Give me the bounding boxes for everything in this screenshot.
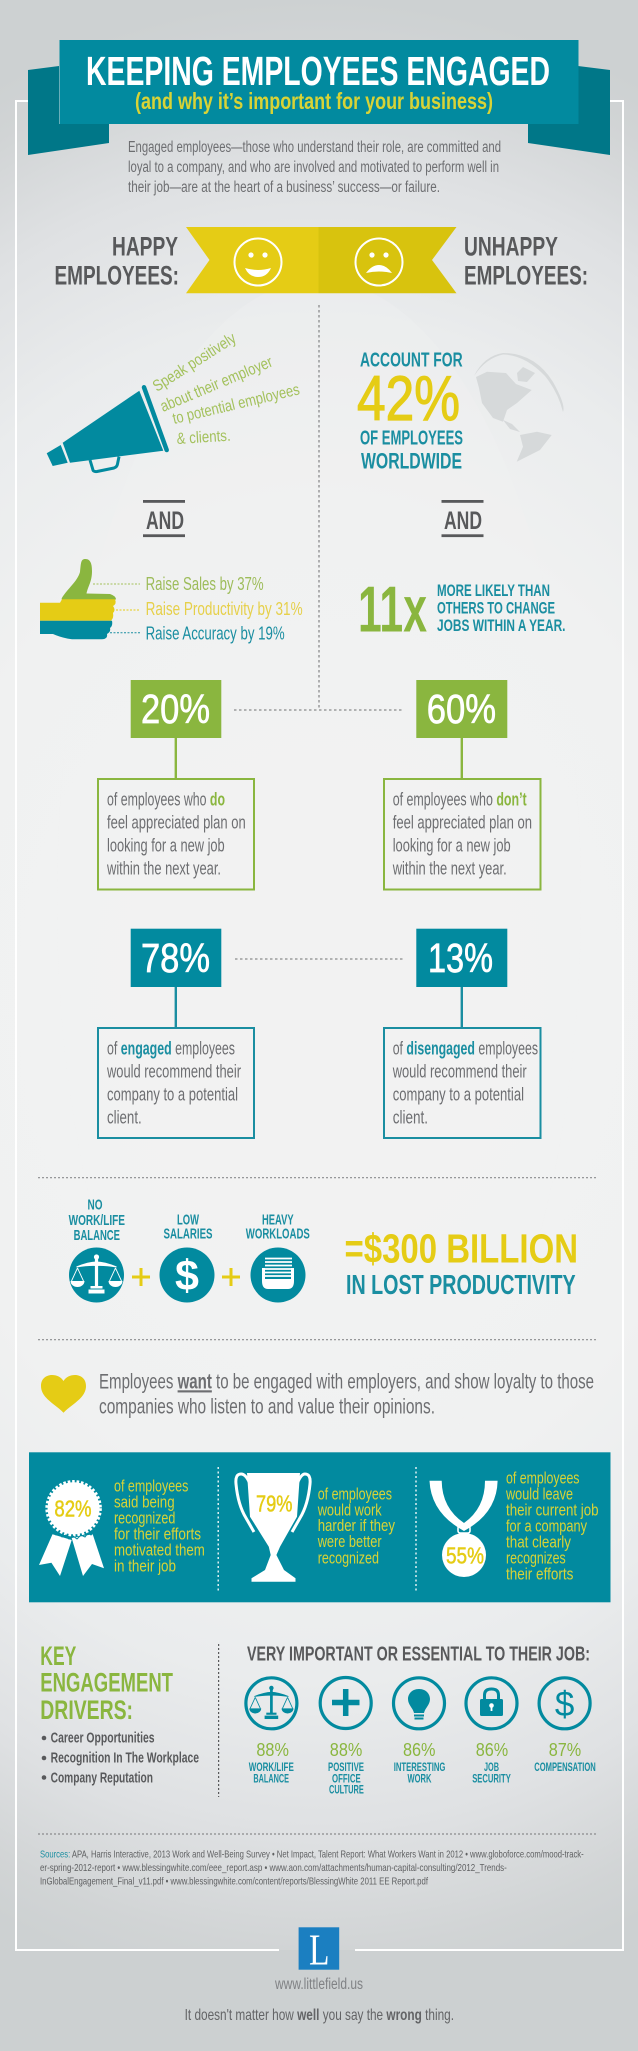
- recognition text 2: were better: [317, 1532, 382, 1551]
- drivers list: Recognition In The Workplace: [51, 1751, 199, 1767]
- driver: job security: JOB: [484, 1760, 499, 1774]
- key engagement drivers heading: [40, 1641, 173, 1725]
- card: 20 percent: within the next year.: [106, 859, 221, 879]
- driver: interesting work: WORK: [408, 1772, 432, 1786]
- driver: compensation: [534, 1678, 596, 1774]
- and right: AND: [444, 507, 482, 535]
- recognition text 3: would leave: [505, 1484, 573, 1503]
- recognition text 3: [505, 1468, 599, 1583]
- recognition text 1: in their job: [114, 1557, 176, 1576]
- title banner: [28, 40, 610, 155]
- recognition text 3: of employees: [506, 1468, 580, 1487]
- driver: compensation: 87%: [549, 1739, 581, 1760]
- card: 20 percent: of employees who do: [107, 790, 225, 810]
- website url: www.littlefield.us: [274, 1976, 363, 1993]
- happy employees heading: [54, 232, 179, 290]
- recognition text 3: recognizes: [506, 1548, 566, 1567]
- key engagement drivers heading: DRIVERS:: [40, 1695, 133, 1725]
- tagline: It doesn't matter how well you say the wrong thing.: [185, 2007, 454, 2024]
- driver: job security: 86%: [476, 1739, 508, 1760]
- stat: 42 percent: OF EMPLOYEES: [360, 426, 463, 449]
- factor: low salaries: SALARIES: [164, 1226, 212, 1243]
- factor: heavy workloads: WORKLOADS: [246, 1226, 310, 1243]
- driver: positive office culture: 88%: [330, 1739, 362, 1760]
- factor: no work/life balance: BALANCE: [74, 1227, 120, 1244]
- stat: 11x: [358, 573, 566, 646]
- driver: job security: SECURITY: [472, 1772, 511, 1786]
- megaphone text: about their employer: [158, 353, 276, 416]
- intro text: Engaged employees—those who understand their role, are committed and: [128, 139, 501, 156]
- recognition text 3: that clearly: [506, 1532, 571, 1551]
- card: 13 percent: would recommend their: [392, 1061, 527, 1081]
- card: 60 percent: within the next year.: [392, 859, 507, 879]
- drivers list: Company Reputation: [51, 1770, 153, 1786]
- card: 78 percent: 78%: [141, 935, 210, 981]
- driver: work/life balance: 88%: [256, 1739, 289, 1760]
- recognition text 3: their efforts: [506, 1564, 573, 1583]
- stat: 42 percent: WORLDWIDE: [361, 448, 462, 473]
- icon: paper stack: [262, 1258, 294, 1289]
- recognition text 2: [317, 1484, 395, 1567]
- raise sales list: Raise Productivity by 31%: [146, 598, 303, 619]
- icon: thumbs up: [40, 559, 116, 639]
- stat: 42 percent: [357, 349, 463, 473]
- icon: frowny: [356, 238, 402, 286]
- recognition text 1: said being: [114, 1492, 175, 1511]
- card: 20 percent: looking for a new job: [107, 836, 225, 856]
- icon: trophy 79 percent: 79%: [256, 1491, 292, 1517]
- recognition text 1: for their efforts: [114, 1524, 201, 1543]
- card: 78 percent: would recommend their: [106, 1061, 241, 1081]
- icon: megaphone: [47, 387, 167, 472]
- recognition text 2: of employees: [318, 1484, 392, 1503]
- intro text: their job—are at the heart of a business’ success—or failure.: [128, 179, 440, 196]
- icon: globe: [474, 353, 564, 462]
- icon: medal 55 percent: 55%: [446, 1542, 484, 1568]
- raise sales list: Raise Sales by 37%: [146, 573, 264, 594]
- raise sales list: Raise Accuracy by 19%: [146, 622, 285, 643]
- stat: 300 billion: =$300 BILLION: [344, 1225, 578, 1271]
- icon: trophy 79 percent: [236, 1473, 310, 1582]
- stat: 42 percent: ACCOUNT FOR: [360, 349, 463, 372]
- megaphone text: to potential employees: [171, 381, 301, 428]
- card: 13 percent: [384, 929, 540, 1138]
- raise sales list: [93, 573, 303, 643]
- center dotted connector: [234, 305, 403, 959]
- sources: InGlobalEngagement_Final_v11.pdf • www.blessingwhite.com/content/reports/BlessingWhite 2011 EE Report.pdf: [40, 1875, 428, 1887]
- card: 60 percent: feel appreciated plan on: [393, 813, 532, 833]
- driver: work/life balance: BALANCE: [253, 1772, 289, 1786]
- sources: [40, 1848, 584, 1887]
- stat: 11x: OTHERS TO CHANGE: [437, 600, 555, 618]
- card: 20 percent: 20%: [141, 686, 210, 732]
- icon: light bulb: [408, 1689, 430, 1720]
- factor: heavy workloads: [246, 1211, 310, 1302]
- recognition text 1: motivated them: [114, 1540, 205, 1559]
- icon: ribbon 82 percent: [39, 1482, 104, 1576]
- driver: positive office culture: CULTURE: [329, 1782, 364, 1796]
- card: 60 percent: looking for a new job: [393, 836, 511, 856]
- factor: no work/life balance: NO: [88, 1196, 103, 1213]
- factor: no work/life balance: [69, 1196, 125, 1302]
- recognition text 2: recognized: [318, 1548, 379, 1567]
- employees want statement: [99, 1369, 594, 1418]
- and left: [143, 500, 185, 537]
- logo: [299, 1925, 339, 1974]
- card: 13 percent: company to a potential: [393, 1084, 524, 1104]
- driver: interesting work: INTERESTING: [394, 1760, 445, 1774]
- intro text: loyal to a company, and who are involved and motivated to perform well in: [128, 159, 499, 176]
- card: 13 percent: of disengaged employees: [393, 1038, 538, 1058]
- recognition text 1: [114, 1477, 205, 1576]
- happy employees heading: EMPLOYEES:: [54, 260, 179, 290]
- card: 78 percent: [98, 929, 254, 1138]
- icon: ribbon 82 percent: 82%: [54, 1496, 92, 1522]
- sources: er-spring-2012-report • www.blessingwhite.com/eee_report.asp • www.aon.com/attachments/human-capital-consulting/2012_Trends-: [40, 1862, 507, 1874]
- stat: 11x: JOBS WITHIN A YEAR.: [437, 617, 566, 635]
- factor: no work/life balance: WORK/LIFE: [69, 1212, 125, 1229]
- panel: recognition stats: [29, 1452, 610, 1602]
- card: 13 percent: 13%: [428, 935, 493, 981]
- and left: AND: [146, 507, 184, 535]
- driver: job security: [466, 1678, 517, 1786]
- megaphone text: [150, 330, 301, 448]
- driver: interesting work: 86%: [403, 1739, 436, 1760]
- icon: medal 55 percent: [430, 1481, 498, 1577]
- unhappy employees heading: [464, 232, 588, 290]
- key engagement drivers heading: KEY: [40, 1641, 76, 1671]
- factor: low salaries: $: [175, 1252, 199, 1300]
- key engagement drivers heading: ENGAGEMENT: [40, 1668, 173, 1698]
- recognition text 2: would work: [317, 1500, 382, 1519]
- icon: scales: [70, 1254, 122, 1294]
- card: 20 percent: feel appreciated plan on: [107, 813, 246, 833]
- factor: low salaries: [160, 1211, 214, 1302]
- recognition text 3: for a company: [506, 1516, 587, 1535]
- icon: plus: [132, 1268, 150, 1286]
- icon: scales: [249, 1686, 294, 1719]
- driver: positive office culture: [320, 1678, 371, 1796]
- recognition text 2: harder if they: [318, 1516, 395, 1535]
- icon: smiley: [234, 238, 282, 286]
- recognition text 1: of employees: [114, 1477, 188, 1496]
- unhappy employees heading: UNHAPPY: [464, 232, 558, 262]
- driver: interesting work: [394, 1678, 445, 1786]
- recognition text 1: recognized: [114, 1508, 175, 1527]
- driver: compensation: COMPENSATION: [534, 1760, 596, 1774]
- card: 20 percent: [98, 680, 254, 890]
- stat: 11x: 11x: [358, 573, 427, 646]
- factor: heavy workloads: HEAVY: [262, 1211, 294, 1228]
- driver: positive office culture: OFFICE: [332, 1772, 361, 1786]
- icon: heart: [41, 1375, 86, 1413]
- icon: plus: [222, 1268, 240, 1286]
- driver: work/life balance: [246, 1678, 297, 1786]
- driver: compensation: $: [555, 1685, 574, 1724]
- stat: 11x: MORE LIKELY THAN: [437, 582, 550, 600]
- driver: work/life balance: WORK/LIFE: [249, 1760, 294, 1774]
- factor: low salaries: LOW: [177, 1211, 200, 1228]
- yellow ribbon with faces: [186, 227, 456, 293]
- and right: [442, 500, 484, 537]
- unhappy employees heading: EMPLOYEES:: [464, 260, 588, 290]
- card: 78 percent: client.: [107, 1107, 142, 1127]
- drivers list: [42, 1731, 199, 1786]
- stat: 42 percent: 42%: [357, 364, 460, 434]
- card: 60 percent: of employees who don’t: [393, 790, 527, 810]
- recognition text 3: their current job: [506, 1500, 599, 1519]
- icon: padlock: [480, 1689, 503, 1716]
- megaphone text: & clients.: [176, 428, 231, 448]
- happy employees heading: HAPPY: [112, 232, 178, 262]
- card: 13 percent: client.: [393, 1107, 428, 1127]
- drivers list: Career Opportunities: [51, 1731, 155, 1747]
- card: 60 percent: 60%: [427, 686, 496, 732]
- subtitle: (and why it’s important for your business): [135, 88, 493, 114]
- logo: L: [309, 1925, 330, 1974]
- card: 60 percent: [384, 680, 540, 890]
- employees want statement: companies who listen to and value their opinions.: [99, 1394, 435, 1418]
- card: 78 percent: company to a potential: [107, 1084, 238, 1104]
- card: 78 percent: of engaged employees: [107, 1038, 235, 1058]
- intro text: [128, 139, 501, 196]
- megaphone text: Speak positively: [150, 330, 239, 395]
- stat: 300 billion: [344, 1225, 578, 1300]
- driver: positive office culture: POSITIVE: [328, 1760, 364, 1774]
